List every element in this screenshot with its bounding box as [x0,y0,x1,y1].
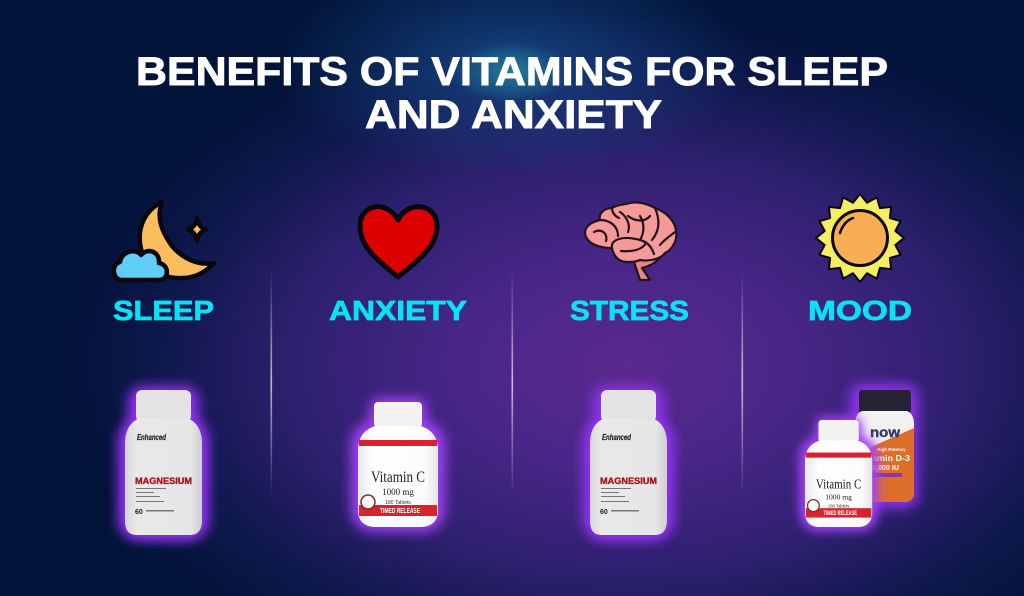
title: AND ANXIETY [365,93,662,137]
icon: brain [585,202,676,280]
bottle: vitamin c: 1000 mg [825,493,852,502]
bottle: vitamin d-3 [850,384,918,508]
bottle: vitamin c: Vitamin C [816,476,861,492]
bottle: magnesium: MAGNESIUM [600,476,657,486]
bottle: vitamin c: TIMED RELEASE [823,511,857,517]
label: stress: STRESS [570,295,689,326]
bottle: magnesium [583,386,674,540]
panel: stress [570,202,689,540]
icon: heart [360,207,437,277]
bottle: vitamin d-3: now [870,424,900,440]
bottle: magnesium [118,386,209,540]
bottle: vitamin d-3: amin D-3 [872,453,910,463]
bottle: vitamin c [351,398,445,532]
label: mood: MOOD [808,295,912,326]
bottle: vitamin d-3: 5,000 IU [872,463,899,472]
bottle: vitamin c: Vitamin C [371,469,425,486]
title [136,50,888,137]
bottle: vitamin c: 180 Tablets [828,503,849,508]
icon: moon, star and cloud [114,202,214,280]
bottle: magnesium: 60 [600,509,608,516]
bottle: vitamin c [799,417,878,531]
bottle: magnesium: 60 [135,509,143,516]
panel: anxiety [329,207,467,532]
label: anxiety: ANXIETY [329,295,467,326]
bottle: magnesium: Enhanced [602,433,632,442]
panel: mood [799,194,918,531]
bottle: vitamin c: 1000 mg [382,487,414,497]
bottle: magnesium: Enhanced [137,433,167,442]
panel: sleep [113,202,214,540]
icon: sun [816,194,904,282]
label: sleep: SLEEP [113,295,214,326]
bottle: vitamin c: 180 Tablets [385,500,411,506]
bottle: vitamin d-3: High Potency [877,447,906,452]
title: BENEFITS OF VITAMINS FOR SLEEP [136,50,888,94]
bottle: magnesium: MAGNESIUM [135,476,192,486]
bottle: vitamin c: TIMED RELEASE [380,508,420,515]
